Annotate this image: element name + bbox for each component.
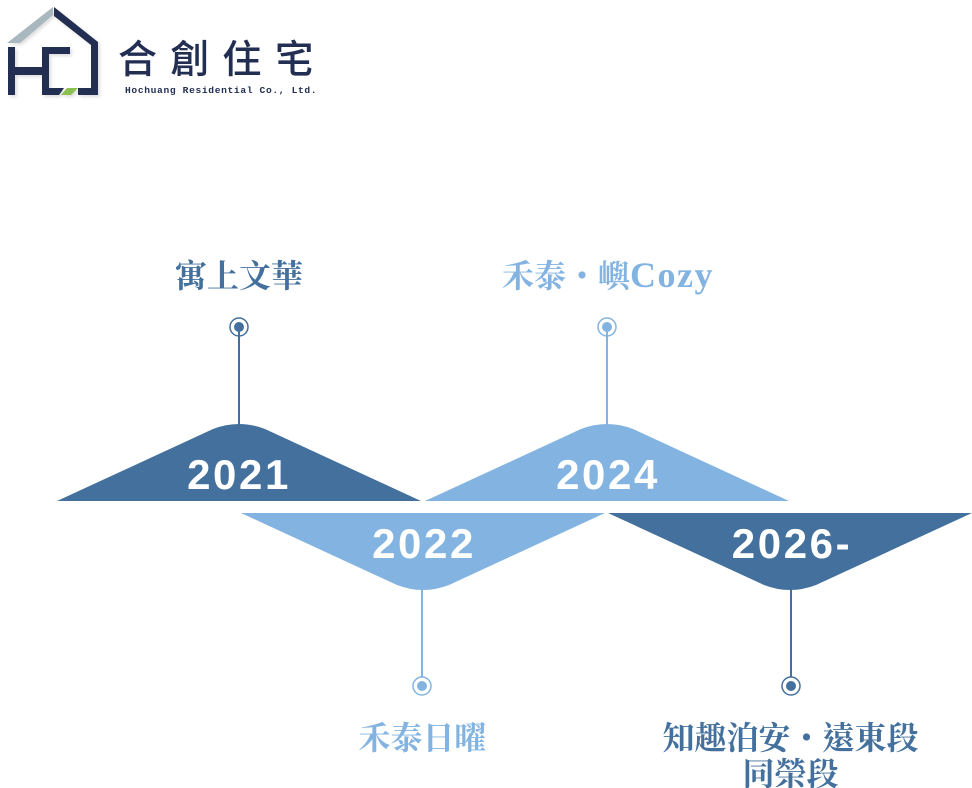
year: 2026- <box>732 520 852 567</box>
year: 2024 <box>556 451 660 498</box>
milestone 2024 <box>425 255 789 501</box>
milestone 2022 <box>241 513 605 756</box>
year: 2022 <box>372 520 476 567</box>
logo <box>7 7 327 96</box>
icon: house logo <box>7 7 98 95</box>
marker <box>230 318 248 426</box>
triangle <box>425 424 789 501</box>
milestone 2021 <box>57 258 421 501</box>
label: 知趣泊安・遠東段 <box>662 720 919 756</box>
marker <box>598 318 616 426</box>
label: 寓上文華 <box>175 258 303 294</box>
logo english name: Hochuang Residential Co., Ltd. <box>125 85 317 96</box>
triangle <box>57 424 421 501</box>
triangle <box>608 513 972 590</box>
logo name: 合創住宅 <box>118 29 327 85</box>
marker <box>782 588 800 695</box>
triangle <box>241 513 605 590</box>
marker <box>413 588 431 695</box>
label: 禾泰日曜 <box>358 720 487 756</box>
year: 2021 <box>187 451 291 498</box>
label: 禾泰・嶼Cozy <box>502 255 714 295</box>
milestone 2026 <box>608 513 972 788</box>
label <box>662 720 919 788</box>
